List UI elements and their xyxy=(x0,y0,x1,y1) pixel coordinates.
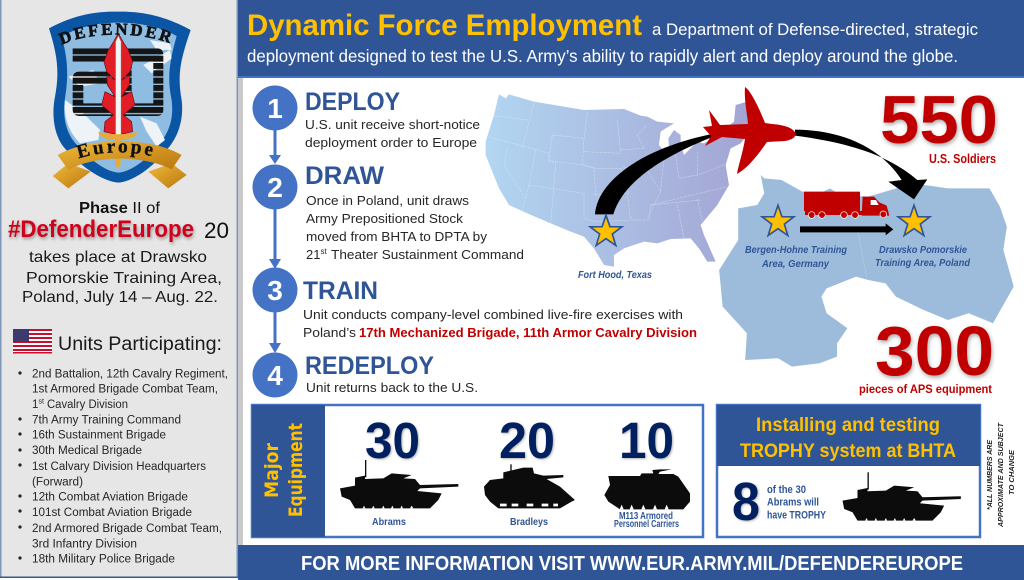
heading: TROPHY: TROPHY system at BHTA xyxy=(740,440,956,462)
list: participating units: 101st Combat Aviation Brigade xyxy=(32,507,192,519)
icon: star Bergen-Hohne xyxy=(762,205,794,235)
list: participating units: 2nd Armored Brigade Combat Team, xyxy=(32,523,222,535)
icon: Abrams with TROPHY xyxy=(842,472,961,521)
stat: 20 Bradleys xyxy=(484,412,575,528)
heading: major equipment: Major xyxy=(261,442,283,498)
icon: Defender Europe crest xyxy=(49,12,191,188)
list: participating units: 1 xyxy=(32,399,38,411)
subtitle xyxy=(247,20,978,66)
stat: 8 of 30: of the 30 xyxy=(767,484,806,496)
list: participating units: (Forward) xyxy=(32,476,83,488)
stat: 30 Abrams xyxy=(340,412,458,528)
step 2: draw: 2 xyxy=(267,172,283,203)
note: numbers approximate xyxy=(985,422,1016,528)
step 4: redeploy xyxy=(252,352,478,398)
step 4: redeploy: 4 xyxy=(267,360,283,391)
stat: 10 M113 carriers: Personnel Carriers xyxy=(614,519,679,530)
stat: 10 M113 carriers: 10 xyxy=(619,412,674,469)
step 1: deploy: 1 xyxy=(267,93,283,124)
step 2: draw xyxy=(252,162,524,262)
step 3: train: Poland’s xyxy=(303,325,357,340)
list: participating units: 2nd Battalion, 12th Cavalry Regiment, xyxy=(32,368,228,380)
label: Drawsko Pomorskie: Training Area, Poland xyxy=(875,257,971,269)
step 3: train xyxy=(252,268,697,340)
panel: left sidebar xyxy=(0,0,238,578)
heading: major equipment xyxy=(261,423,307,517)
stat: 20 Bradleys: Bradleys xyxy=(510,516,548,528)
label: Bergen-Hohne xyxy=(745,244,848,270)
text block: phase statement: 20 xyxy=(204,218,229,243)
label: Bergen-Hohne: Bergen-Hohne Training xyxy=(745,244,848,256)
step 1: deploy: deployment order to Europe xyxy=(305,135,477,150)
text block: phase statement xyxy=(8,200,229,306)
icon: red airplane xyxy=(703,87,796,174)
step 1: deploy: DEPLOY xyxy=(305,88,400,116)
label: Drawsko Pomorskie: Drawsko Pomorskie xyxy=(879,244,967,256)
step 1: deploy: U.S. unit receive short-notice xyxy=(305,117,480,132)
stat: 10 M113 carriers xyxy=(604,412,690,530)
step 3: train: TRAIN xyxy=(303,277,378,305)
heading: units participating: Units Participating: xyxy=(58,334,222,355)
step 2: draw: moved from BHTA to DPTA by xyxy=(306,229,488,244)
step 4: redeploy: Unit returns back to the U.S. xyxy=(306,380,478,395)
arrow: step 2 to 3 xyxy=(269,207,281,269)
list: participating units: st xyxy=(38,398,44,406)
step 3: train: Unit conducts company-level combined live-fire exercises with xyxy=(303,307,683,322)
arrow: flight arc left section xyxy=(595,134,714,214)
icon: red truck xyxy=(804,192,889,218)
step 2: draw: Army Prepositioned Stock xyxy=(306,211,464,226)
stat: 10 M113 carriers: M113 Armored xyxy=(619,511,673,522)
panel: major equipment xyxy=(252,405,703,537)
callout: 550 soldiers: 550 xyxy=(880,82,998,158)
icon: Defender Europe crest: Europe xyxy=(75,143,153,158)
step 2: draw: 21 xyxy=(306,247,320,262)
callout: 300 pieces of equipment: 300 xyxy=(875,312,994,390)
subtitle: deployment designed to test the U.S. Army’s ability to rapidly alert and deploy around the globe. xyxy=(247,46,958,66)
label: Drawsko Pomorskie xyxy=(875,244,971,269)
label: Fort Hood: Fort Hood, Texas xyxy=(578,269,652,281)
step 3: train: 17th Mechanized Brigade, 11th Armor Cavalry Division xyxy=(359,325,697,340)
arrow: step 1 to 2 xyxy=(269,128,281,164)
list: participating units: 1st Calvary Division Headquarters xyxy=(32,461,206,473)
list: participating units: 1st Armored Brigade Combat Team, xyxy=(32,384,218,396)
step 4: redeploy: REDEPLOY xyxy=(305,352,434,380)
callout: 300 pieces of equipment: pieces of APS equipment xyxy=(859,382,992,396)
footer banner xyxy=(238,545,1024,580)
icon: US flag xyxy=(13,329,52,354)
stat: 8 of 30 xyxy=(732,472,827,532)
text block: phase statement: #DefenderEurope xyxy=(8,216,194,243)
list: participating units: 18th Military Police Brigade xyxy=(32,554,175,566)
icon: Defender Europe crest: DEFENDER xyxy=(58,23,171,45)
step 2: draw: st xyxy=(320,247,328,256)
arrow: flight arc right section xyxy=(795,130,927,199)
footer banner: FOR MORE INFORMATION VISIT WWW.EUR.ARMY.MIL/DEFENDEREUROPE xyxy=(301,553,963,575)
stat: 8 of 30: have TROPHY xyxy=(767,510,827,522)
step 2: draw: Theater Sustainment Command xyxy=(331,247,524,262)
heading: TROPHY xyxy=(740,414,956,462)
chart: four-step process xyxy=(252,86,697,398)
stat: 30 Abrams: 30 xyxy=(365,412,420,469)
icon: star Fort Hood xyxy=(590,215,622,245)
step 1: deploy xyxy=(252,86,480,150)
callout: 550 soldiers: U.S. Soldiers xyxy=(929,152,996,166)
map: United States xyxy=(486,94,754,267)
text block: phase statement: Phase II of xyxy=(79,200,161,217)
step 3: train: 3 xyxy=(267,275,283,306)
arrow: Germany to Poland xyxy=(800,223,893,235)
list: participating units: Cavalry Division xyxy=(47,399,128,411)
title: Dynamic Force Employment xyxy=(247,9,642,42)
text block: phase statement: takes place at Drawsko xyxy=(29,249,207,266)
list: participating units: 30th Medical Brigade xyxy=(32,445,142,457)
note: numbers approximate: TO CHANGE xyxy=(1007,449,1016,495)
arrow: step 3 to 4 xyxy=(269,310,281,353)
stat: 8 of 30: 8 xyxy=(732,472,760,532)
panel: header banner xyxy=(238,0,1024,78)
text block: phase statement: Poland, July 14 – Aug. 22. xyxy=(22,289,218,306)
subtitle: a Department of Defense-directed, strategic xyxy=(652,20,978,39)
text block: phase statement: Pomorskie Training Area, xyxy=(26,270,222,287)
chart: deployment map xyxy=(486,87,1014,367)
label: Bergen-Hohne: Area, Germany xyxy=(761,258,830,270)
note: numbers approximate: APPROXIMATE AND SUBJECT xyxy=(996,422,1005,528)
stat: 20 Bradleys: 20 xyxy=(499,412,555,469)
list: participating units: 7th Army Training Command xyxy=(32,414,181,426)
step 2: draw: DRAW xyxy=(305,162,384,190)
heading: major equipment: Equipment xyxy=(285,423,307,517)
map: Germany and Poland xyxy=(719,175,1014,367)
list: participating units: 3rd Infantry Division xyxy=(32,538,137,550)
list: participating units: 12th Combat Aviation Brigade xyxy=(32,492,188,504)
stat: 8 of 30: Abrams will xyxy=(767,496,819,508)
stat: 30 Abrams: Abrams xyxy=(372,516,406,528)
heading: TROPHY: Installing and testing xyxy=(756,414,940,436)
step 2: draw: Once in Poland, unit draws xyxy=(306,193,470,208)
note: numbers approximate: *ALL NUMBERS ARE xyxy=(985,439,994,510)
icon: star Drawsko Pomorskie xyxy=(898,205,930,235)
panel: TROPHY system xyxy=(717,405,980,537)
list: participating units: 16th Sustainment Brigade xyxy=(32,430,166,442)
list: participating units xyxy=(18,368,228,566)
